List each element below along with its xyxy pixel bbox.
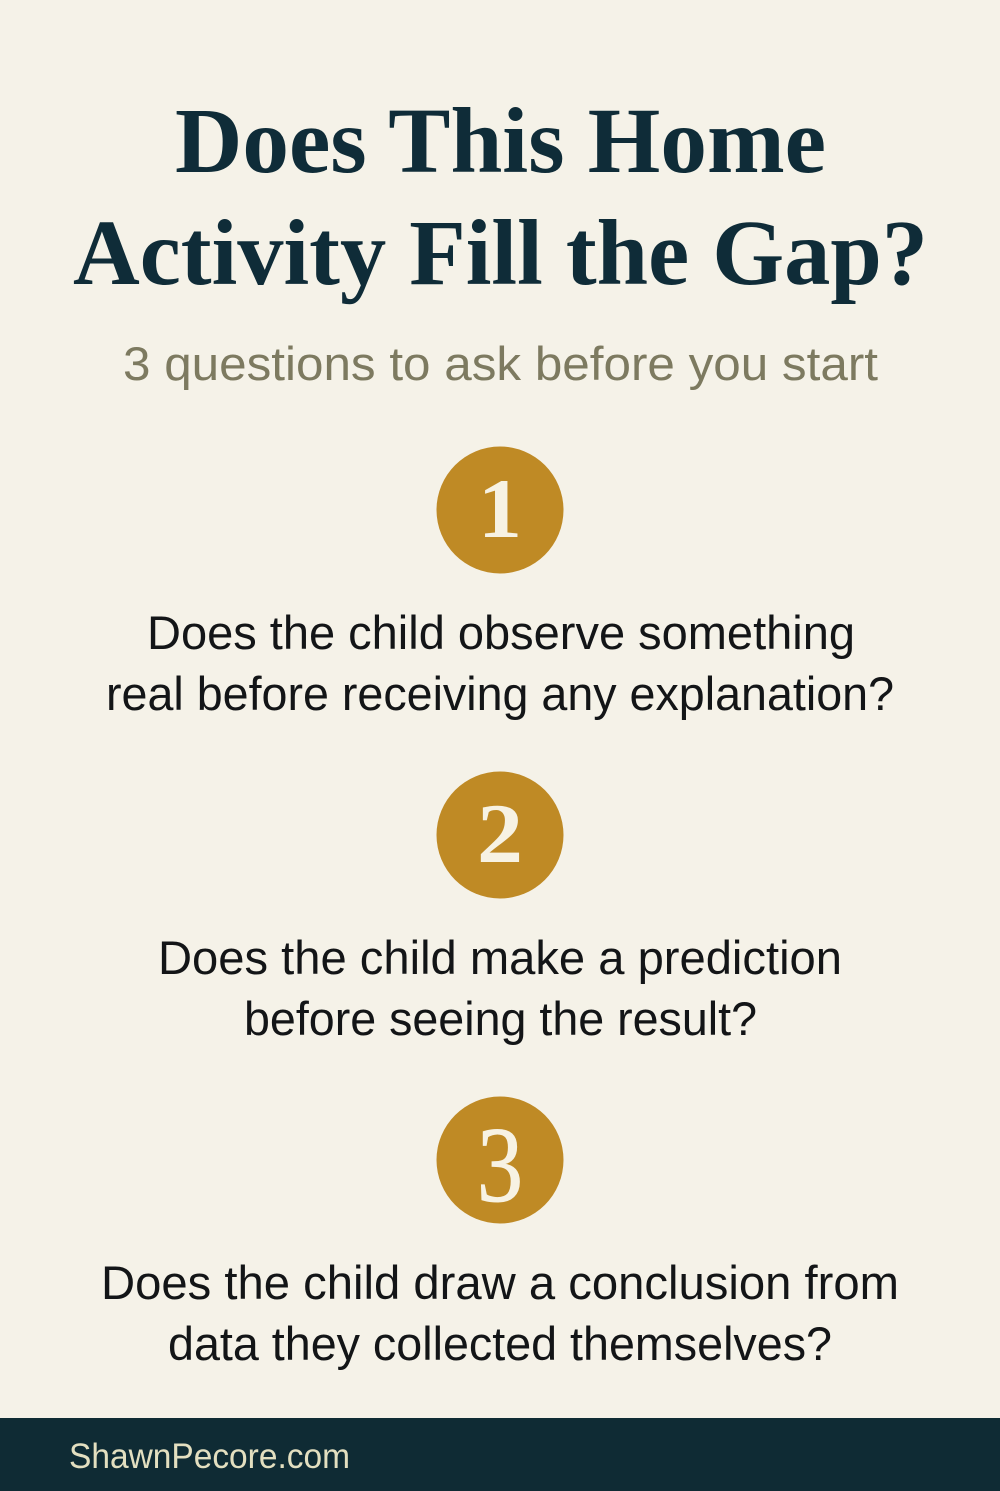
subtitle: 3 questions to ask before you start bbox=[123, 337, 878, 390]
title bbox=[73, 90, 928, 305]
question 3 text: data they collected themselves? bbox=[168, 1317, 832, 1370]
title: Activity Fill the Gap? bbox=[73, 202, 928, 305]
title: Does This Home bbox=[175, 90, 826, 193]
question 2 number badge: 2 bbox=[477, 787, 523, 881]
question 1 number badge bbox=[436, 446, 564, 574]
question 1 text bbox=[106, 606, 894, 720]
question 2 text: before seeing the result? bbox=[244, 992, 757, 1045]
question 2 number badge bbox=[436, 772, 564, 898]
footer band bbox=[0, 1418, 1000, 1491]
footer website: ShawnPecore.com bbox=[69, 1437, 350, 1476]
question 3 number badge: 3 bbox=[477, 1106, 523, 1225]
question 3 text: Does the child draw a conclusion from bbox=[101, 1256, 899, 1309]
question 1 number badge: 1 bbox=[478, 462, 522, 556]
question 1 text: real before receiving any explanation? bbox=[106, 667, 894, 720]
question 2 text: Does the child make a prediction bbox=[158, 931, 842, 984]
question 3 text bbox=[101, 1256, 899, 1370]
question 1 text: Does the child observe something bbox=[147, 606, 855, 659]
question 3 number badge bbox=[436, 1096, 564, 1225]
question 2 text bbox=[158, 931, 842, 1045]
